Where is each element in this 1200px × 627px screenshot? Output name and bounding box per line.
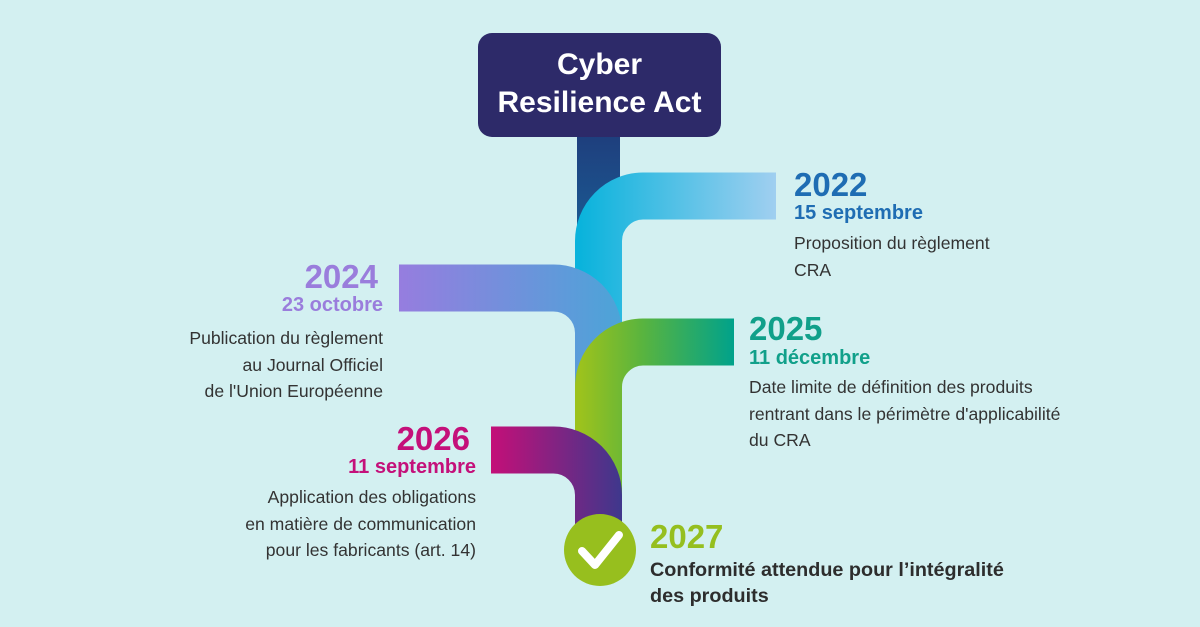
arm: 2022 — [598, 196, 776, 330]
arm: 2024 — [399, 288, 598, 430]
event: 2027: 2027 — [650, 518, 723, 555]
event: 2025: Date limite de définition des produits — [749, 377, 1033, 397]
event: 2022 — [794, 166, 990, 280]
title box — [478, 33, 721, 137]
event: 2024: 2024 — [305, 258, 378, 295]
title box: Resilience Act — [498, 86, 701, 119]
icon: check circle — [564, 514, 636, 586]
event: 2026: 2026 — [397, 420, 470, 457]
event: 2026: 11 septembre — [348, 456, 476, 478]
event: 2026 — [245, 420, 476, 560]
event: 2027: Conformité attendue pour l’intégralité — [650, 559, 1004, 581]
event: 2022: CRA — [794, 260, 831, 280]
event: 2027 — [650, 518, 1004, 607]
trunk — [577, 130, 620, 330]
event: 2024: de l'Union Européenne — [205, 381, 383, 401]
arm: 2025 — [598, 342, 734, 530]
arm: 2026 — [491, 450, 598, 535]
event: 2025: du CRA — [749, 430, 811, 450]
event: 2025: rentrant dans le périmètre d'applicabilité — [749, 404, 1060, 424]
event: 2022: 15 septembre — [794, 202, 923, 224]
event: 2022: 2022 — [794, 166, 867, 203]
title box: Cyber — [557, 48, 642, 81]
event: 2022: Proposition du règlement — [794, 233, 990, 253]
event: 2024: Publication du règlement — [189, 328, 383, 348]
event: 2027: des produits — [650, 585, 769, 607]
event: 2026: pour les fabricants (art. 14) — [266, 540, 476, 560]
event: 2024 — [189, 258, 383, 401]
event: 2025: 2025 — [749, 310, 822, 347]
event: 2024: 23 octobre — [282, 294, 383, 316]
event: 2026: en matière de communication — [245, 514, 476, 534]
event: 2025 — [749, 310, 1060, 450]
event: 2024: au Journal Officiel — [242, 354, 383, 374]
event: 2025: 11 décembre — [749, 347, 870, 369]
event: 2026: Application des obligations — [268, 487, 476, 507]
